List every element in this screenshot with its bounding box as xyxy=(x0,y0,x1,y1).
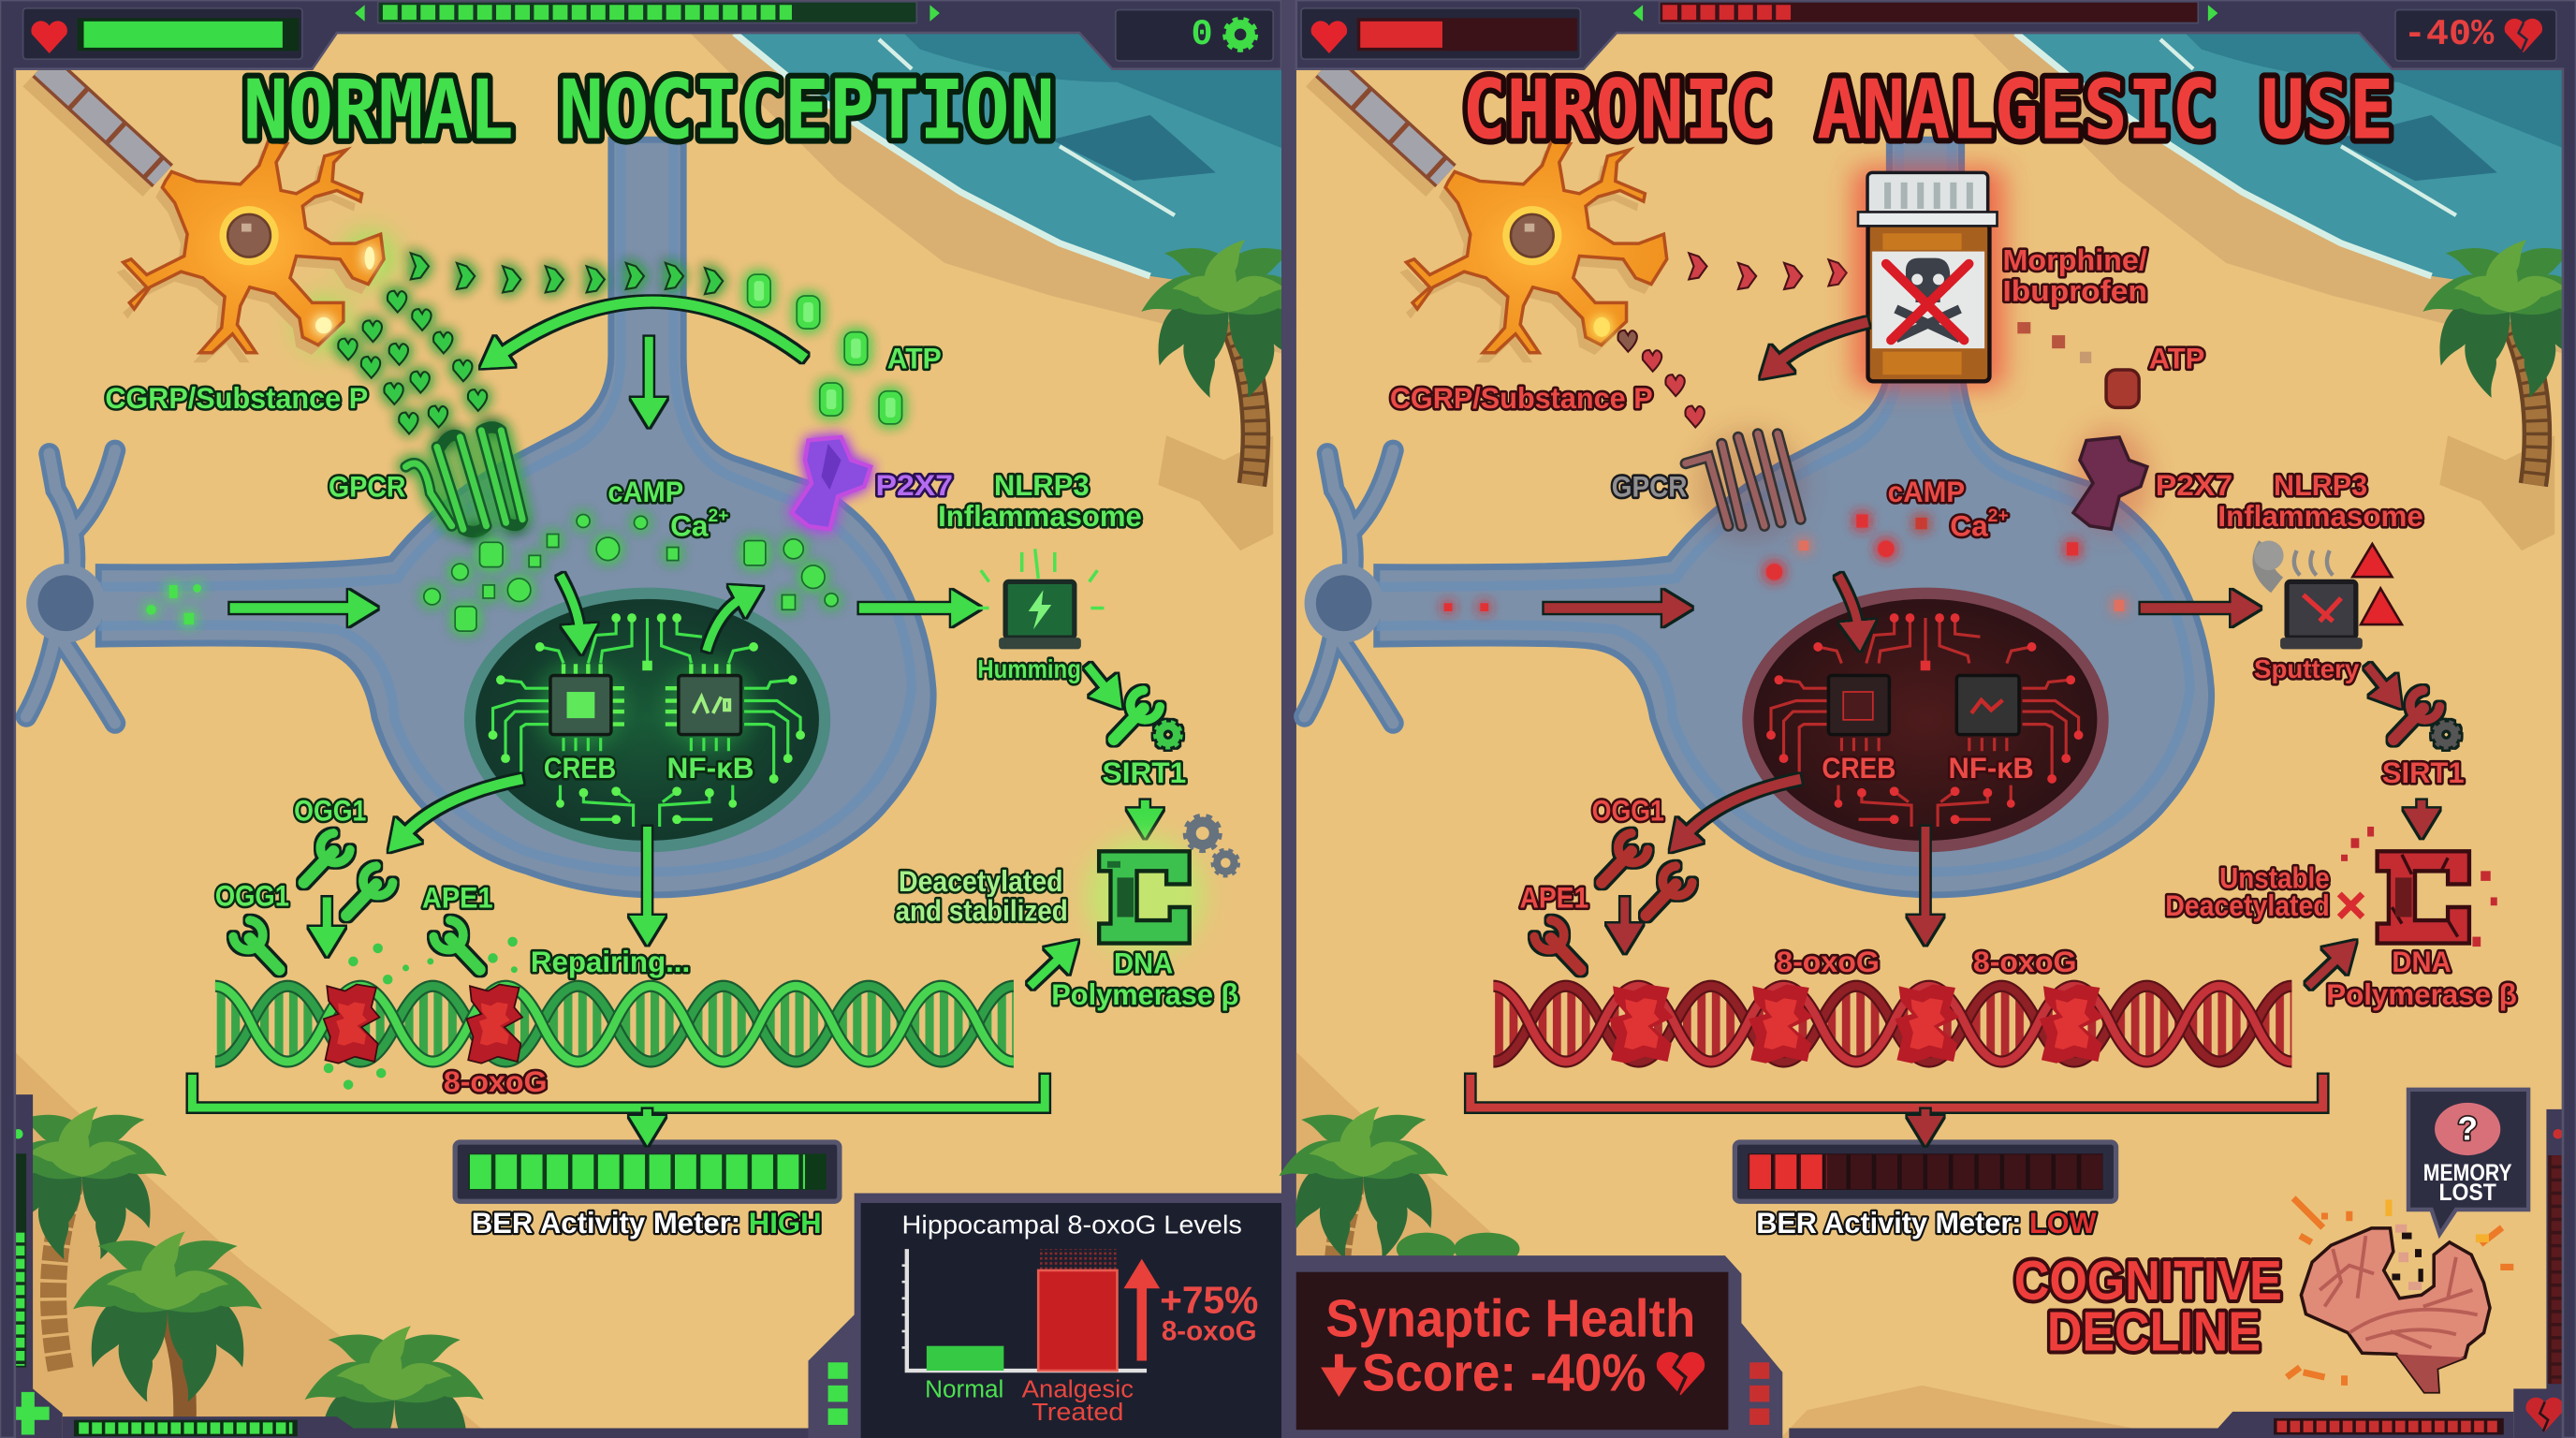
reduced neuropeptides xyxy=(1617,253,1847,427)
divider frame xyxy=(1281,0,1296,1438)
nucleus dim xyxy=(1748,594,2103,846)
labels: Polymerase β xyxy=(1051,977,1238,1011)
labels: 2+ xyxy=(708,506,728,526)
labels: SIRT1 xyxy=(1103,756,1186,789)
neuron terminal highlights xyxy=(315,246,374,333)
labels: P2X7 xyxy=(2156,468,2232,502)
axon signal particles xyxy=(146,584,201,624)
neuron terminal glow xyxy=(1593,317,1610,337)
beach background right xyxy=(1281,0,2576,1438)
score box xyxy=(1116,10,1273,61)
synaptic health panel xyxy=(1288,1255,1782,1438)
arrow down from nucleus xyxy=(645,827,650,922)
bottom strip gauge xyxy=(1789,1412,2513,1438)
labels xyxy=(105,342,1238,1098)
labels: 8-oxoG xyxy=(1776,945,1880,978)
bracket to meter xyxy=(1471,1075,2323,1108)
neuron terminal green glow xyxy=(298,232,396,350)
arrow into meter xyxy=(645,1109,650,1123)
brain icon crumbling xyxy=(2287,1198,2513,1392)
bar chart xyxy=(902,1249,1147,1371)
curved arrow from nucleus to enzymes xyxy=(404,779,522,835)
arrow from bottle xyxy=(1778,322,1868,363)
P2X7 receptor xyxy=(792,437,871,529)
labels: GPCR xyxy=(329,470,406,504)
score text: Score: -40% xyxy=(1362,1343,1647,1401)
broken wrenches xyxy=(1534,833,1692,970)
labels: DNA xyxy=(2392,945,2452,978)
labels: Unstable xyxy=(2219,860,2330,894)
labels: 8-oxoG xyxy=(1973,945,2076,978)
dim P2X7 xyxy=(2071,427,2150,533)
chip NF-kB xyxy=(1956,675,2019,735)
score box xyxy=(2395,10,2556,61)
BER activity meter low xyxy=(1734,1142,2116,1201)
repair sparkles xyxy=(324,937,518,1090)
repair wrenches xyxy=(233,833,479,970)
labels: APE1 xyxy=(1519,880,1588,914)
chart title: Hippocampal 8-oxoG Levels xyxy=(902,1210,1242,1239)
orange sensory neuron xyxy=(1316,66,1667,362)
labels: Morphine/ xyxy=(2002,242,2147,276)
palm tree bottom left xyxy=(1276,1093,1519,1371)
GPCR receptor xyxy=(406,427,522,532)
axon arrow xyxy=(230,606,355,611)
arrow down to DNA from enzymes xyxy=(325,897,329,933)
curved arrow from nucleus xyxy=(1686,779,1801,835)
icon: humming inflammasome laptop xyxy=(976,549,1104,649)
arrow to inflammasome xyxy=(859,606,958,611)
icon: SIRT1 wrench xyxy=(1114,690,1180,747)
cognitive decline heading: COGNITIVE xyxy=(2014,1249,2282,1312)
icon: plus xyxy=(7,1392,50,1434)
progress bar xyxy=(355,2,940,23)
postsynaptic neuron body xyxy=(1305,139,2212,895)
memory lost bubble xyxy=(2408,1090,2528,1234)
labels: P2X7 xyxy=(875,468,953,502)
arrow to polymerase xyxy=(1143,800,1148,815)
labels xyxy=(1390,242,2517,1011)
nucleus xyxy=(470,594,825,846)
signalling arrows into nucleus xyxy=(560,575,742,651)
beach background left xyxy=(15,33,1320,1438)
labels: DNA xyxy=(1114,946,1173,980)
labels: CGRP/Substance P xyxy=(105,381,368,415)
labels: Polymerase β xyxy=(2326,977,2517,1011)
postsynaptic neuron body xyxy=(26,139,933,895)
arc arrow ATP to CGRP xyxy=(500,301,805,359)
labels: CREB xyxy=(1822,751,1895,785)
side LED bar xyxy=(0,1094,63,1438)
labels: APE1 xyxy=(422,880,493,914)
arrow into meter xyxy=(1923,1109,1927,1123)
labels: Ca xyxy=(1950,509,1988,543)
labels: NLRP3 xyxy=(994,468,1090,502)
arrow into nucleus xyxy=(1838,575,1858,628)
arrow to polymerase from DNA xyxy=(1030,957,1061,986)
cognitive decline heading: DECLINE xyxy=(2047,1299,2261,1362)
labels: GPCR xyxy=(1612,470,1688,504)
stat label: 8-oxoG xyxy=(1162,1315,1257,1346)
dim GPCR xyxy=(1686,429,1806,541)
bar label analgesic treated: Analgesic xyxy=(1022,1374,1134,1402)
cracked DNA polymerase xyxy=(2341,827,2497,946)
brain question icon: ? xyxy=(2457,1110,2478,1147)
labels: NLRP3 xyxy=(2274,468,2367,502)
memory lost text: LOST xyxy=(2438,1181,2496,1206)
8-oxoG lesions xyxy=(324,985,522,1064)
labels: ATP xyxy=(887,342,942,375)
cognitive decline heading xyxy=(2014,1249,2282,1362)
arrow to polymerase from DNA xyxy=(2308,957,2339,986)
arrow up red xyxy=(1139,1282,1145,1360)
cross mark xyxy=(2339,894,2363,917)
stem arrow down xyxy=(647,337,651,404)
arrow to SIRT1 xyxy=(2367,666,2387,690)
top HUD left xyxy=(0,0,1281,1438)
stat +75%: +75% xyxy=(1160,1279,1258,1322)
labels: Humming xyxy=(977,654,1081,683)
icon: sputtering laptop with warnings xyxy=(2254,541,2402,649)
labels: Sputtery xyxy=(2254,654,2360,683)
score box: 0 xyxy=(1191,14,1213,55)
arrow down from enzymes xyxy=(1622,897,1627,931)
chip CREB xyxy=(1828,675,1889,735)
top HUD right xyxy=(1296,0,2576,1438)
health bar xyxy=(1301,8,1580,59)
labels: 2+ xyxy=(1988,506,2009,526)
side LED bar xyxy=(2513,1109,2576,1438)
dim sand patch xyxy=(1781,1386,2185,1438)
title: CHRONIC ANALGESIC USE xyxy=(1462,63,2393,158)
score box: -40% xyxy=(2404,14,2495,55)
red sparse particles xyxy=(1444,514,2124,611)
arrow to SIRT1 xyxy=(1088,666,1107,690)
labels: Inflammasome xyxy=(2217,499,2423,533)
labels: Deacetylated xyxy=(899,864,1063,898)
icon: SIRT1 wrench xyxy=(2393,690,2459,747)
icon: broken heart corner xyxy=(2525,1398,2564,1431)
gears by polymerase xyxy=(1186,816,1237,875)
DNA polymerase beta xyxy=(1086,837,1204,955)
bar label normal: Normal xyxy=(925,1374,1003,1402)
labels: CREB xyxy=(544,751,616,785)
labels: NF-κB xyxy=(667,751,754,785)
labels: Inflammasome xyxy=(938,499,1142,533)
synaptic health text: Synaptic Health xyxy=(1325,1288,1695,1347)
BER activity meter xyxy=(455,1142,840,1201)
panel: chronic analgesic use xyxy=(1276,0,2576,1438)
labels: cAMP xyxy=(1888,475,1965,508)
labels: Deacetylated xyxy=(2165,888,2330,922)
bottom strip gauge xyxy=(63,1416,822,1438)
arrow to inflammasome xyxy=(2141,606,2237,611)
chip CREB xyxy=(550,664,624,735)
health bar xyxy=(23,8,302,59)
labels: and stabilized xyxy=(896,894,1068,928)
labels: cAMP xyxy=(607,475,683,508)
labels: OGG1 xyxy=(1592,793,1664,827)
progress bar xyxy=(1633,2,2217,23)
icon: broken heart xyxy=(1657,1352,1705,1395)
labels: CGRP/Substance P xyxy=(1390,381,1653,415)
DNA helix with damage xyxy=(215,985,1014,1064)
memory lost text xyxy=(2423,1161,2512,1206)
ATP particles xyxy=(748,274,902,424)
chip NF-kB xyxy=(666,664,741,735)
labels: SIRT1 xyxy=(2382,756,2465,789)
skull icon xyxy=(1895,258,1960,339)
bracket to meter xyxy=(192,1075,1045,1108)
morphine pill bottle xyxy=(1853,168,2004,388)
labels: Ibuprofen xyxy=(2002,274,2147,308)
bar label analgesic treated: Treated xyxy=(1032,1398,1123,1426)
score arrow icon xyxy=(1337,1354,1341,1374)
bar label analgesic treated xyxy=(1022,1374,1134,1426)
cAMP calcium particles xyxy=(424,514,838,631)
ATP debris xyxy=(2017,322,2139,407)
palm trees bottom left xyxy=(0,1093,488,1438)
labels: Repairing... xyxy=(531,945,690,978)
red cross xyxy=(1886,264,1969,340)
8-oxoG lesions xyxy=(1609,985,2103,1064)
orange sensory neuron xyxy=(33,66,384,362)
arrow down from nucleus xyxy=(1923,827,1927,922)
labels: OGG1 xyxy=(215,879,289,913)
title: NORMAL NOCICEPTION xyxy=(243,63,1055,158)
brain question icon xyxy=(2435,1103,2500,1155)
memory lost text: MEMORY xyxy=(2423,1161,2512,1186)
labels: 8-oxoG xyxy=(444,1064,547,1098)
labels: OGG1 xyxy=(294,793,366,827)
labels: NF-κB xyxy=(1949,751,2034,785)
labels: ATP xyxy=(2149,342,2204,375)
DNA helix heavily damaged xyxy=(1493,985,2291,1064)
arrow to polymerase xyxy=(2420,800,2424,815)
neuropeptide particles xyxy=(338,253,723,433)
chart panel: hippocampal 8-oxoG levels xyxy=(809,1193,1288,1438)
BER meter label: BER Activity Meter: HIGH xyxy=(472,1206,822,1240)
panel: normal nociception xyxy=(0,0,1320,1438)
axon arrow xyxy=(1544,606,1669,611)
labels: Ca xyxy=(670,509,708,543)
BER meter label: BER Activity Meter: LOW xyxy=(1756,1206,2097,1240)
